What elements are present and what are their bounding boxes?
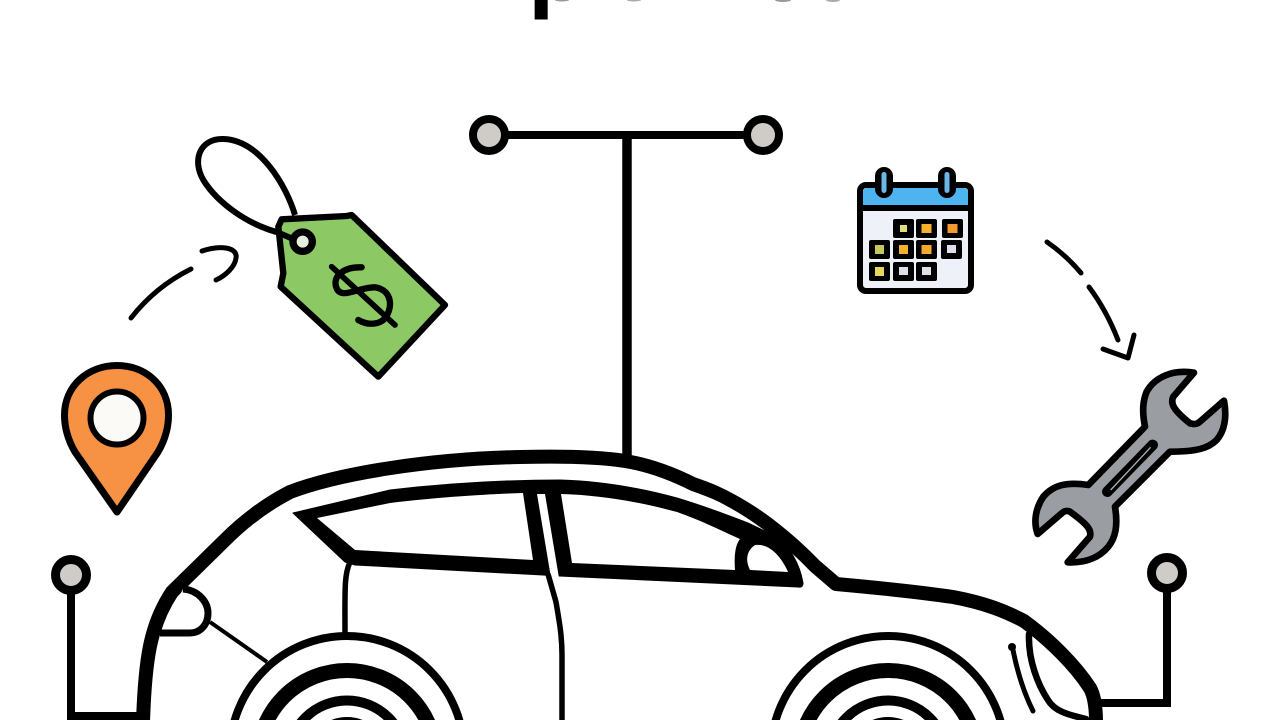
car body outline xyxy=(143,457,1096,720)
connector: top T xyxy=(473,119,779,462)
title (cropped heading) xyxy=(528,0,840,21)
icon: wrench xyxy=(1035,372,1225,562)
car headlight xyxy=(1008,634,1086,719)
car tail light xyxy=(160,589,208,633)
rear wheel xyxy=(230,636,464,720)
icon: location pin xyxy=(64,366,168,512)
connector: left xyxy=(56,560,145,716)
tail light strut xyxy=(210,622,267,662)
icon: calendar xyxy=(860,167,971,291)
calendar day cells xyxy=(869,219,963,281)
front wheel xyxy=(771,636,1005,720)
car door lines xyxy=(345,562,562,720)
car xyxy=(143,457,1096,720)
arrow: pin to price tag xyxy=(131,248,236,318)
arrow: calendar to wrench xyxy=(1047,242,1134,358)
icon: price tag xyxy=(198,139,445,377)
car windows xyxy=(293,480,803,587)
connector: right xyxy=(1097,558,1182,703)
